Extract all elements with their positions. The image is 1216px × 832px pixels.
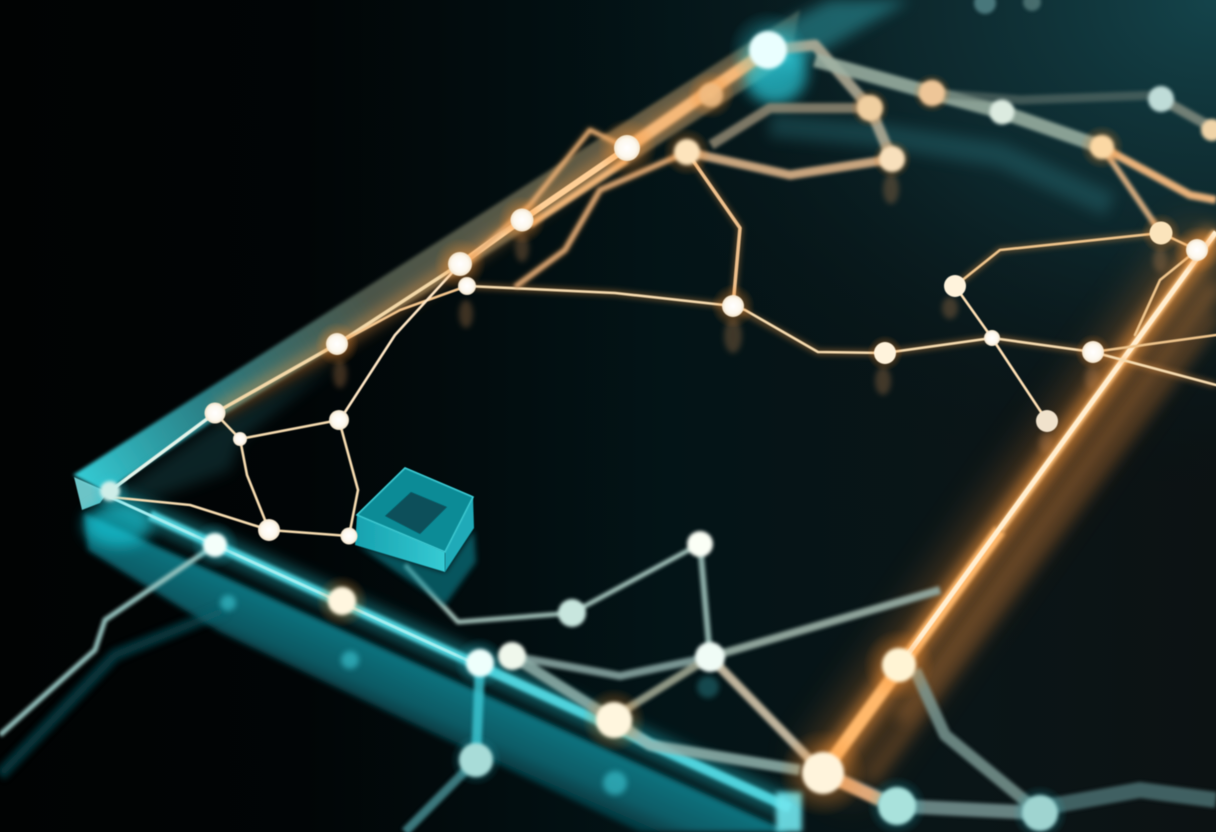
cube edges [357, 468, 473, 552]
nodes: sharp upper network [204, 135, 1208, 544]
parallel ghost reflections [900, 285, 1216, 720]
left corner cyan bloom [84, 503, 152, 547]
bottom corner cyan post [776, 792, 802, 832]
network lines: orange upper network glow [467, 130, 1216, 385]
glass plate edges [73, 0, 910, 832]
cube side face [445, 497, 474, 572]
orange lit edge [825, 232, 1216, 780]
brown glow around edge [825, 240, 1216, 780]
right cell [955, 233, 1197, 286]
cube top face [357, 468, 473, 552]
corner highlight of the plate [74, 477, 108, 510]
back edge of the glass plate [73, 10, 800, 492]
bright front edge line [110, 497, 790, 808]
left cell [345, 264, 460, 412]
top cyan streak beyond the corner [760, 0, 910, 70]
edge line [110, 413, 215, 491]
bright cyan reflections on front edge [220, 595, 719, 795]
network lines: lower network [0, 544, 1216, 832]
soft reflections below nodes [333, 174, 1167, 453]
long horizontal trace [467, 286, 1216, 385]
cube reflection [357, 530, 476, 605]
upper orange glow halo along the back edge [215, 50, 768, 413]
main orange edge [825, 232, 1216, 770]
top corner cyan glow [743, 40, 807, 104]
network lines: upper network [110, 148, 1216, 536]
cube inner hollow [385, 492, 447, 534]
glass cube [355, 468, 476, 605]
network lines: blurred far traces [467, 45, 1216, 287]
cube front face [355, 515, 445, 572]
front side glow of plate [84, 513, 790, 832]
centre branch [687, 152, 740, 306]
teal reflection of far traces [770, 125, 1110, 205]
plate inner surface tint [120, 360, 340, 500]
